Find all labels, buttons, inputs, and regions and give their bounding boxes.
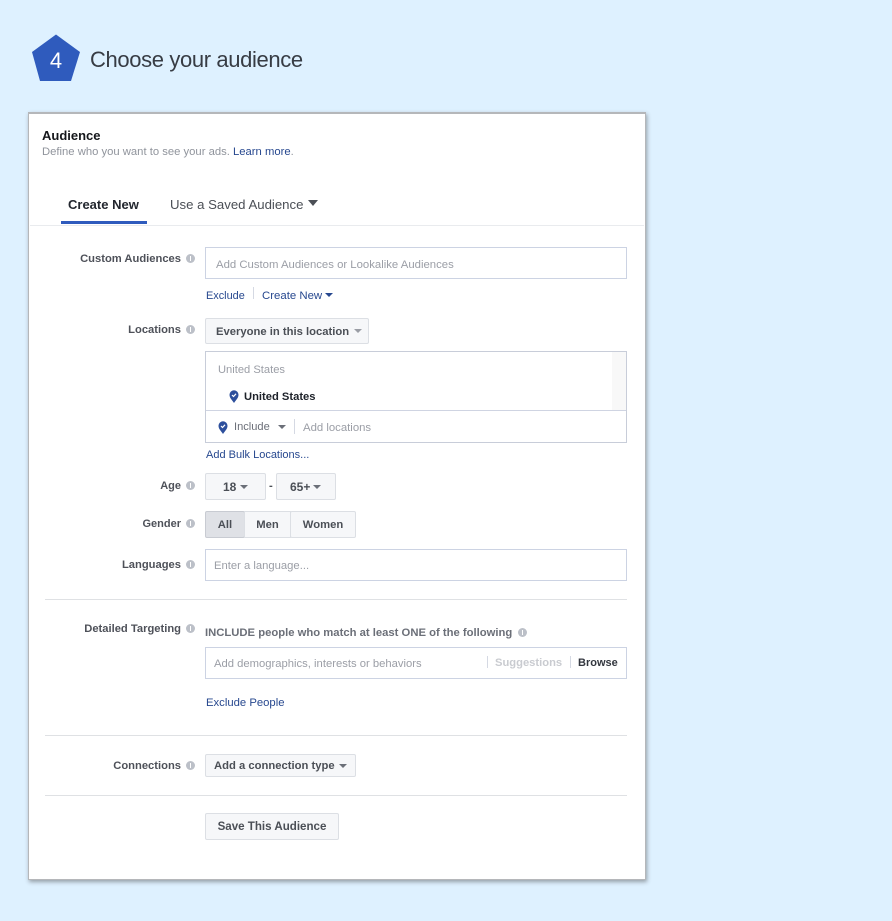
link: Add Bulk Locations: Add Bulk Locations... xyxy=(206,449,309,461)
placeholder: detailed targeting: Add demographics, interests or behaviors xyxy=(214,658,422,670)
separator: suggestions xyxy=(487,656,488,668)
tab underline xyxy=(61,221,147,224)
icon: connection caret xyxy=(339,764,347,768)
label: Locations: Locations xyxy=(128,324,181,336)
panel description: Define who you want to see your ads. Learn more. xyxy=(42,146,294,158)
input: languages xyxy=(205,549,627,581)
link: Exclude People: Exclude People xyxy=(206,697,285,709)
separator: include xyxy=(294,419,295,434)
icon: info xyxy=(186,519,195,528)
button group: gender xyxy=(205,511,356,538)
dropdown: minimum age xyxy=(205,473,266,500)
placeholder: add locations: Add locations xyxy=(303,422,371,434)
label: Languages: Languages xyxy=(122,559,181,571)
link: Create New: Create New xyxy=(262,290,322,302)
dropdown: maximum age: 65+ xyxy=(290,480,310,494)
icon: include pin xyxy=(218,421,228,434)
icon: info xyxy=(186,624,195,633)
dropdown: location type xyxy=(205,318,369,344)
text: country group: United States xyxy=(218,364,285,376)
button: Women: Women xyxy=(303,519,343,531)
button: Save This Audience xyxy=(205,813,339,840)
separator: exclude and create xyxy=(253,287,254,299)
button: Men: Men xyxy=(256,519,279,531)
icon: step number pentagon xyxy=(32,34,80,81)
tab: Use a Saved Audience: Use a Saved Audience xyxy=(170,197,303,212)
icon: saved audience caret xyxy=(308,200,318,206)
label: Custom Audiences: Custom Audiences xyxy=(80,253,181,265)
tab bar divider xyxy=(30,225,644,226)
text: selected location: United States xyxy=(244,391,316,403)
icon: create new caret xyxy=(325,293,333,297)
button: Save This Audience: Save This Audience xyxy=(218,821,326,833)
title: Choose your audience xyxy=(90,47,303,72)
icon: location type caret xyxy=(354,329,362,333)
input: detailed targeting xyxy=(205,647,627,679)
scroll track xyxy=(612,352,626,411)
icon: info xyxy=(186,481,195,490)
dropdown: include: Include xyxy=(234,421,270,433)
dropdown: minimum age: 18 xyxy=(223,480,236,494)
placeholder: custom audiences: Add Custom Audiences or Lookalike Audiences xyxy=(216,259,454,271)
tab: Suggestions: Suggestions xyxy=(495,657,562,669)
placeholder: languages: Enter a language... xyxy=(214,560,309,572)
label: Age: Age xyxy=(160,480,181,492)
icon: info xyxy=(186,325,195,334)
dropdown: location type: Everyone in this location xyxy=(216,326,349,338)
label: Connections: Connections xyxy=(113,760,181,772)
icon: info xyxy=(186,560,195,569)
dropdown: connection type xyxy=(205,754,356,777)
link: Exclude: Exclude xyxy=(206,290,245,302)
panel heading: Audience xyxy=(42,128,101,143)
icon: include caret xyxy=(278,425,286,429)
text: include rule: INCLUDE people who match at least ONE of the following xyxy=(205,627,512,639)
panel: audience form xyxy=(28,112,646,880)
icon: info xyxy=(186,761,195,770)
icon: step number pentagon: 4 xyxy=(50,48,62,73)
button: All xyxy=(205,511,245,538)
button: Women xyxy=(290,511,356,538)
tab: Browse: Browse xyxy=(578,657,618,669)
icon: location pin xyxy=(230,390,238,403)
icon: max age caret xyxy=(313,485,321,489)
separator: browse xyxy=(570,656,571,668)
input: custom audiences xyxy=(205,247,627,279)
icon: info xyxy=(186,254,195,263)
label: Detailed Targeting: Detailed Targeting xyxy=(84,623,181,635)
dropdown: connection type: Add a connection type xyxy=(214,760,335,772)
icon: info xyxy=(518,628,527,637)
text: age dash: - xyxy=(269,480,273,492)
dropdown: maximum age xyxy=(276,473,336,500)
button: All: All xyxy=(218,519,232,531)
label: Gender: Gender xyxy=(142,518,181,530)
icon: min age caret xyxy=(240,485,248,489)
box: locations xyxy=(205,351,627,443)
location box divider xyxy=(206,410,626,411)
button: Men xyxy=(244,511,291,538)
tab: Create New: Create New xyxy=(68,197,139,212)
